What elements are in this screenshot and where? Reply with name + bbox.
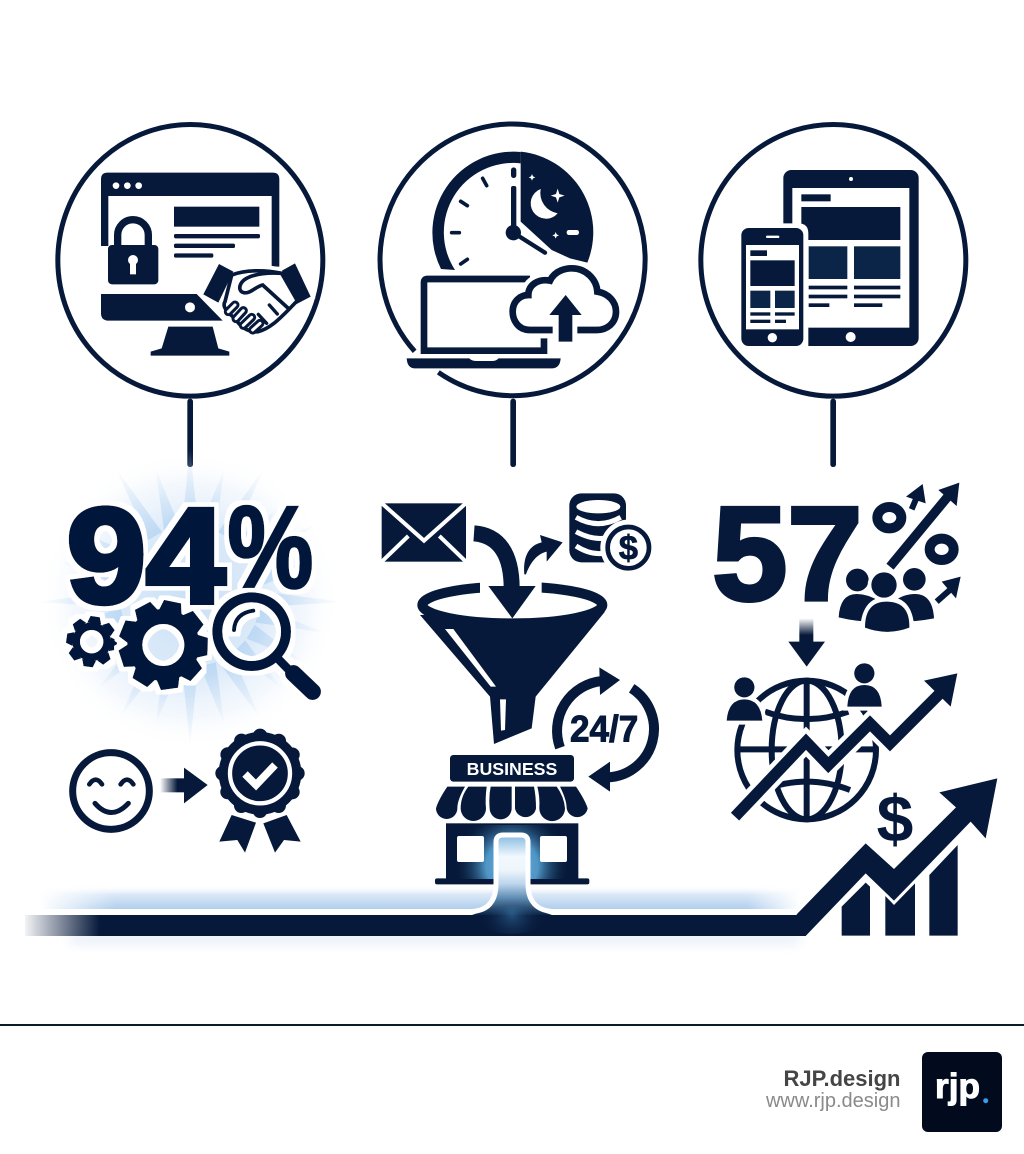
icon: cloud upload: [513, 268, 616, 342]
57 percent number: [712, 480, 959, 629]
panel: responsive devices icon: [701, 124, 966, 467]
icon: coin stack: $: [619, 530, 638, 568]
icon: globe with people: [727, 663, 882, 819]
arrow: small growth right: [937, 577, 961, 602]
icon: 24/7 cycle: 24/7: [570, 708, 638, 750]
road glow: [40, 885, 800, 942]
panel: speed and uptime icon: [380, 124, 645, 467]
panel: funnel and business: [380, 493, 656, 884]
icon: laptop: [407, 279, 561, 368]
connector line: [830, 399, 836, 467]
shop awning: [436, 787, 588, 821]
icon: small gear: [66, 616, 118, 668]
logo: [922, 1052, 1002, 1132]
road line: [25, 915, 806, 936]
icon: dollar sign: $: [877, 781, 913, 855]
connector line: [187, 399, 193, 467]
94 percent number: [67, 480, 313, 631]
logo: rjp: [935, 1067, 980, 1106]
icon circle: [58, 124, 323, 396]
icon: smiley face: [73, 753, 149, 829]
94 percent number: %: [227, 482, 313, 613]
padlock: [105, 220, 161, 287]
57 percent number: 57: [712, 480, 862, 629]
icon: funnel: [420, 587, 605, 744]
icon circle with gap: [380, 124, 645, 396]
footer brand text: RJP.design: [784, 1066, 900, 1091]
connector line: [510, 399, 516, 467]
icon: storefront: [435, 755, 589, 884]
monitor base: [101, 294, 229, 356]
icon: magnifying glass: [217, 597, 313, 692]
footer brand text: [765, 1066, 900, 1112]
door light beam: [25, 825, 797, 934]
arrow: globe growth line: [735, 673, 957, 817]
panel: 57 percent statistic: [712, 480, 997, 936]
icon: day and night clock: [432, 152, 593, 270]
icon: handshake: [203, 263, 311, 332]
arrow: into funnel: [474, 533, 542, 618]
panel: secure website icon: [58, 124, 323, 467]
icon: customer group: [839, 568, 934, 634]
shop sign: BUSINESS: [467, 759, 557, 779]
arrow: small up arrow: [524, 535, 563, 574]
icon: revenue bars: [842, 845, 958, 936]
icon: tablet: [783, 170, 919, 346]
icon: large gear: [117, 599, 208, 691]
shop building: [435, 823, 589, 884]
footer divider: [0, 1024, 1024, 1026]
arrow: small growth up: [906, 484, 926, 509]
icon: award badge: [219, 732, 301, 853]
icon: coin stack: [569, 493, 656, 576]
icon: 24/7 cycle: [557, 667, 654, 792]
94 percent number: 94: [67, 480, 225, 631]
icon: phone: [738, 223, 808, 350]
shop sign: [450, 755, 574, 782]
arrow: revenue growth: [797, 778, 997, 936]
panel: 94 percent statistic: [36, 447, 344, 853]
starburst glow: [36, 447, 344, 750]
arrow: down to globe: [788, 618, 825, 667]
icon circle: [701, 124, 966, 396]
arrow: to badge: [160, 768, 208, 803]
browser window: [101, 173, 279, 267]
icon: envelope: [380, 502, 468, 563]
footer brand text: www.rjp.design: [765, 1090, 900, 1112]
